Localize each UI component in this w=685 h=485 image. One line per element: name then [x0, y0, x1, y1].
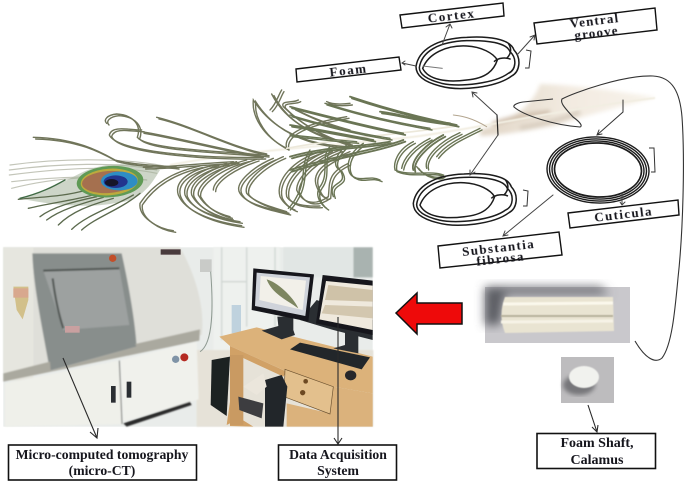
cross-section: calamus ring	[546, 135, 650, 205]
label: Data Acquisition System: Data Acquisition	[289, 447, 387, 462]
label: Micro-computed tomography	[8, 445, 196, 480]
label: Foam: Foam	[329, 60, 368, 80]
label: Ventral groove: Ventral	[569, 10, 620, 31]
machine upper body	[3, 247, 202, 380]
monitor stands	[262, 317, 295, 339]
label: Data Acquisition System: System	[317, 463, 360, 478]
label: Ventral groove: groove	[573, 22, 619, 43]
label: Data Acquisition System	[278, 445, 396, 480]
right monitor	[316, 275, 373, 335]
label: Micro-computed tomography: Micro-computed tomography	[16, 447, 189, 462]
feather barbs, right half	[287, 97, 487, 210]
arrow: foam shaft pointer	[588, 405, 598, 432]
desk drawer	[284, 369, 333, 414]
label: Micro-computed tomography: (micro-CT)	[69, 463, 135, 479]
label: Substantia fibrosa: fibrosa	[476, 248, 525, 269]
photo: foam shaft cross-section	[561, 357, 614, 403]
machine grey panel	[32, 253, 137, 371]
label: Ventral groove	[534, 8, 657, 44]
label: Cortex	[400, 3, 504, 28]
feather barbs, left half	[33, 90, 352, 232]
floor	[197, 350, 373, 427]
label: Cuticula: Cuticula	[593, 203, 654, 225]
machine door window	[43, 268, 129, 330]
cross-section: bottom	[413, 174, 516, 225]
feather shaft	[170, 98, 655, 165]
feather quill, pale end	[480, 84, 656, 136]
computer towers	[211, 357, 230, 416]
arrow: micro-CT pointer	[63, 358, 98, 438]
grey band	[3, 329, 200, 382]
label: Foam	[296, 57, 401, 82]
photo: micro-CT machine and data acquisition workstation	[3, 247, 373, 427]
label: Cortex: Cortex	[427, 5, 476, 26]
eye: outer green	[76, 164, 144, 200]
label: Foam Shaft, Calamus: Calamus	[571, 453, 624, 468]
cross-section: top, foam shaft near mid feather	[416, 37, 519, 88]
lower cabinets	[5, 361, 122, 427]
wall thickness brackets	[523, 50, 655, 206]
peacock feather	[9, 84, 656, 232]
feather eye and eye-side barbs	[9, 160, 170, 230]
wall and door	[213, 247, 280, 361]
label: Cuticula	[568, 200, 679, 228]
diagram pointer arrows	[402, 24, 625, 236]
label: Foam Shaft, Calamus: Foam Shaft,	[560, 436, 634, 451]
photo: foam shaft side view	[485, 287, 630, 343]
printer and papers	[243, 373, 267, 395]
red arrow pointing to micro-CT	[396, 293, 462, 334]
left monitor	[252, 268, 314, 322]
arrow: data acquisition pointer	[334, 317, 342, 444]
label: Substantia fibrosa: Substantia	[461, 236, 536, 259]
desk	[219, 327, 373, 393]
label: Foam Shaft, Calamus	[537, 434, 656, 468]
label: Substantia fibrosa	[438, 232, 562, 269]
machine details	[13, 249, 241, 403]
keyboard	[290, 343, 370, 369]
long curved connector from quill to calamus sample	[514, 76, 683, 360]
